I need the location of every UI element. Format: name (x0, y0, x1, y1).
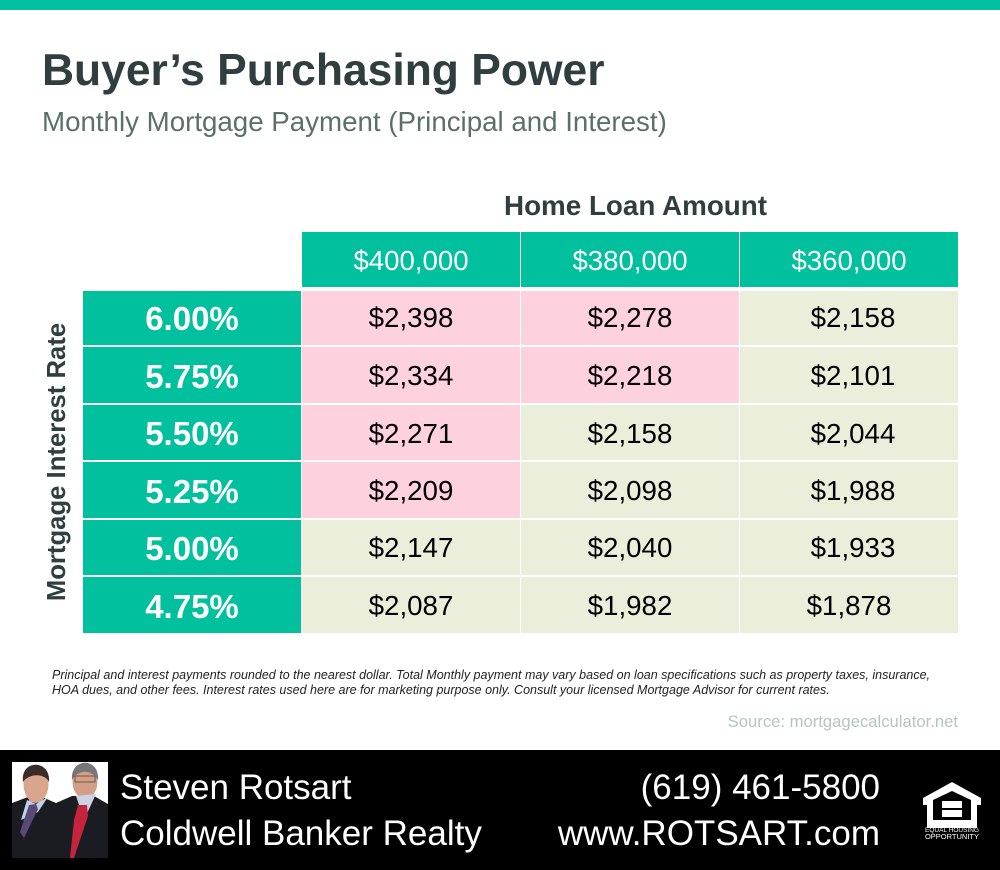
agent name: Steven Rotsart (120, 768, 352, 807)
rate 5.25 (83, 462, 301, 518)
value: $2,158 (811, 302, 895, 333)
brokerage: Coldwell Banker Realty (120, 814, 482, 853)
rate 4.75: 4.75% (145, 588, 239, 625)
value (302, 577, 520, 633)
rate 5.75: 5.75% (145, 358, 239, 395)
value (740, 405, 958, 460)
value: $2,158 (588, 418, 672, 448)
column header: 380k (521, 232, 739, 287)
rate 6.00: 6.00% (145, 300, 239, 337)
title: Buyer’s Purchasing Power (42, 46, 604, 95)
value (740, 291, 958, 345)
icon caption: EQUAL HOUSING (925, 827, 979, 834)
value: $2,398 (369, 302, 453, 333)
rate 5.00 (83, 520, 301, 575)
value: $2,098 (588, 475, 672, 506)
value (521, 520, 739, 575)
disclaimer: Principal and interest payments rounded to the nearest dollar. Total Monthly payment may vary based on loan specifications such as property taxes, insurance, (52, 668, 930, 682)
value (740, 462, 958, 518)
value: $1,982 (588, 590, 672, 621)
value (740, 577, 958, 633)
value: $2,101 (811, 360, 895, 391)
value (521, 405, 739, 460)
value (302, 291, 520, 345)
source: Source: mortgagecalculator.net (728, 712, 958, 731)
top accent bar (0, 0, 1000, 10)
table: mortgage payments (83, 232, 958, 633)
value: $1,878 (807, 590, 891, 621)
footer bar (0, 750, 1000, 870)
value (302, 462, 520, 518)
value (521, 577, 739, 633)
value: $1,988 (811, 475, 895, 506)
value: $2,147 (369, 532, 453, 563)
value (302, 405, 520, 460)
value: $2,044 (811, 418, 895, 448)
website: www.ROTSART.com (558, 814, 880, 853)
column axis heading: Home Loan Amount (504, 190, 767, 221)
icon: equal housing opportunity (923, 782, 981, 840)
phone: (619) 461-5800 (641, 768, 880, 807)
disclaimer (52, 668, 930, 697)
value (740, 347, 958, 403)
value: $2,271 (369, 418, 453, 448)
rate 5.75 (83, 347, 301, 403)
subtitle: Monthly Mortgage Payment (Principal and Interest) (42, 106, 667, 137)
value (740, 520, 958, 575)
column header: 380k: $380,000 (572, 244, 688, 276)
icon caption: OPPORTUNITY (925, 832, 979, 840)
value (521, 347, 739, 403)
value: $2,040 (588, 532, 672, 563)
rate 6.00 (83, 291, 301, 345)
rate 4.75 (83, 577, 301, 633)
value (302, 520, 520, 575)
value: $2,087 (369, 590, 453, 621)
value (302, 347, 520, 403)
column header: 400k: $400,000 (353, 244, 469, 276)
value (521, 291, 739, 345)
icon caption (925, 827, 979, 840)
rate 5.50 (83, 405, 301, 460)
row axis heading: Mortgage Interest Rate (42, 323, 70, 601)
value: $1,933 (811, 532, 895, 563)
column header: 360k (740, 232, 958, 287)
value: $2,278 (588, 302, 672, 333)
value: $2,209 (369, 475, 453, 506)
rate 5.50: 5.50% (145, 414, 239, 452)
value: $2,334 (369, 360, 453, 391)
rate 5.25: 5.25% (145, 473, 239, 510)
column header: 360k: $360,000 (791, 244, 907, 276)
agent photo (12, 762, 108, 858)
disclaimer: HOA dues, and other fees. Interest rates used here are for marketing purpose only. Consult your licensed Mortgage Advisor for current rates. (52, 683, 830, 697)
column header: 400k (302, 232, 520, 287)
rate 5.00: 5.00% (145, 530, 239, 566)
value: $2,218 (588, 360, 672, 391)
value (521, 462, 739, 518)
